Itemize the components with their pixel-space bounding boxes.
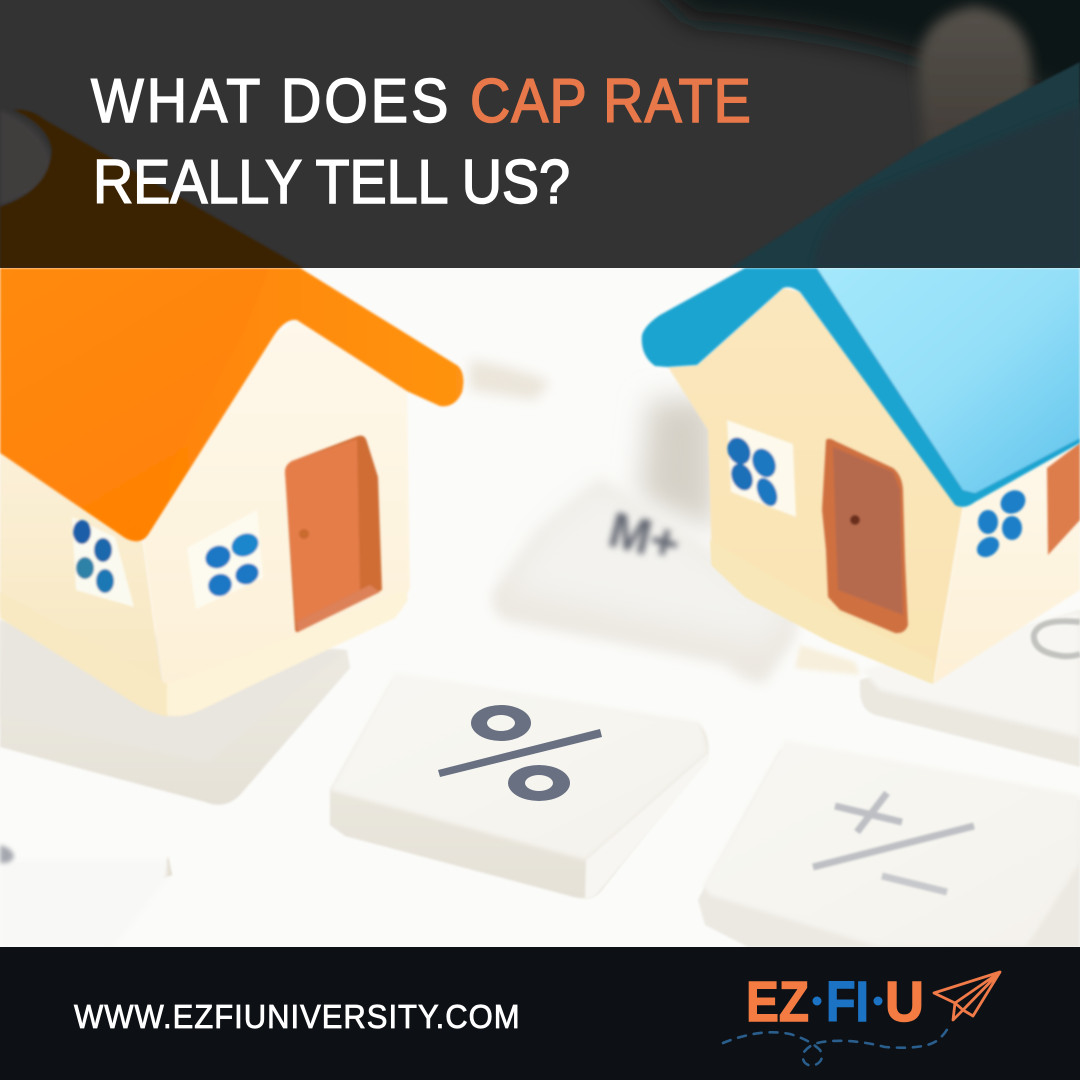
front wall xyxy=(143,320,410,716)
key label: C xyxy=(1034,621,1080,656)
title: REALLY TELL US? xyxy=(93,148,570,217)
front wall xyxy=(668,288,963,683)
roof xyxy=(642,268,1080,507)
dimmed orange roof xyxy=(0,110,303,268)
key: lower left xyxy=(164,857,173,878)
logo wordmark: FI xyxy=(826,970,869,1034)
logo wordmark xyxy=(746,970,924,1034)
logo: EZ-FI-U with paper plane xyxy=(723,970,1000,1066)
key label: plus minus xyxy=(813,793,974,892)
key: percent xyxy=(330,728,708,899)
key: under blue house xyxy=(860,610,1080,767)
front door xyxy=(822,439,908,633)
title: WHAT DOES xyxy=(91,67,448,136)
blue house xyxy=(642,268,1080,684)
footer bar xyxy=(0,947,1080,1080)
right window xyxy=(975,488,1028,559)
blurred peg right xyxy=(913,0,1038,142)
website address: WWW.EZFIUNIVERSITY.COM xyxy=(74,998,520,1035)
base highlight xyxy=(246,595,408,688)
title xyxy=(91,67,751,217)
left window xyxy=(72,517,134,607)
logo wordmark: U xyxy=(885,970,924,1034)
icon: paper plane xyxy=(934,972,1000,1020)
blurred peg left xyxy=(1,112,50,202)
cream reflection between keys xyxy=(795,645,860,675)
dashed flight path xyxy=(723,1025,949,1066)
photo: calculator keyboard with two toy houses xyxy=(0,268,1080,947)
dimmed blue roof xyxy=(730,62,1080,268)
key: blurred M+ key xyxy=(492,480,797,683)
keyboard keys xyxy=(0,480,1080,947)
left wall xyxy=(0,454,162,681)
logo wordmark: EZ xyxy=(746,970,809,1034)
key label: percent sign xyxy=(438,705,602,801)
key label: blurred M+: M+ xyxy=(603,501,686,573)
top band: dark overlay on the photo xyxy=(0,0,1080,268)
right door xyxy=(1047,443,1080,555)
orange house xyxy=(0,268,463,716)
right window xyxy=(187,510,263,609)
door xyxy=(285,436,382,632)
key label: left edge mark xyxy=(0,845,14,863)
key: plus minus xyxy=(698,862,1080,947)
key: under orange house xyxy=(0,620,350,805)
title: CAP RATE xyxy=(470,67,751,136)
right wall xyxy=(933,443,1080,684)
roof xyxy=(0,268,463,541)
key labels xyxy=(0,501,1080,892)
front window xyxy=(723,420,796,517)
blurred dark background region xyxy=(652,0,1080,102)
